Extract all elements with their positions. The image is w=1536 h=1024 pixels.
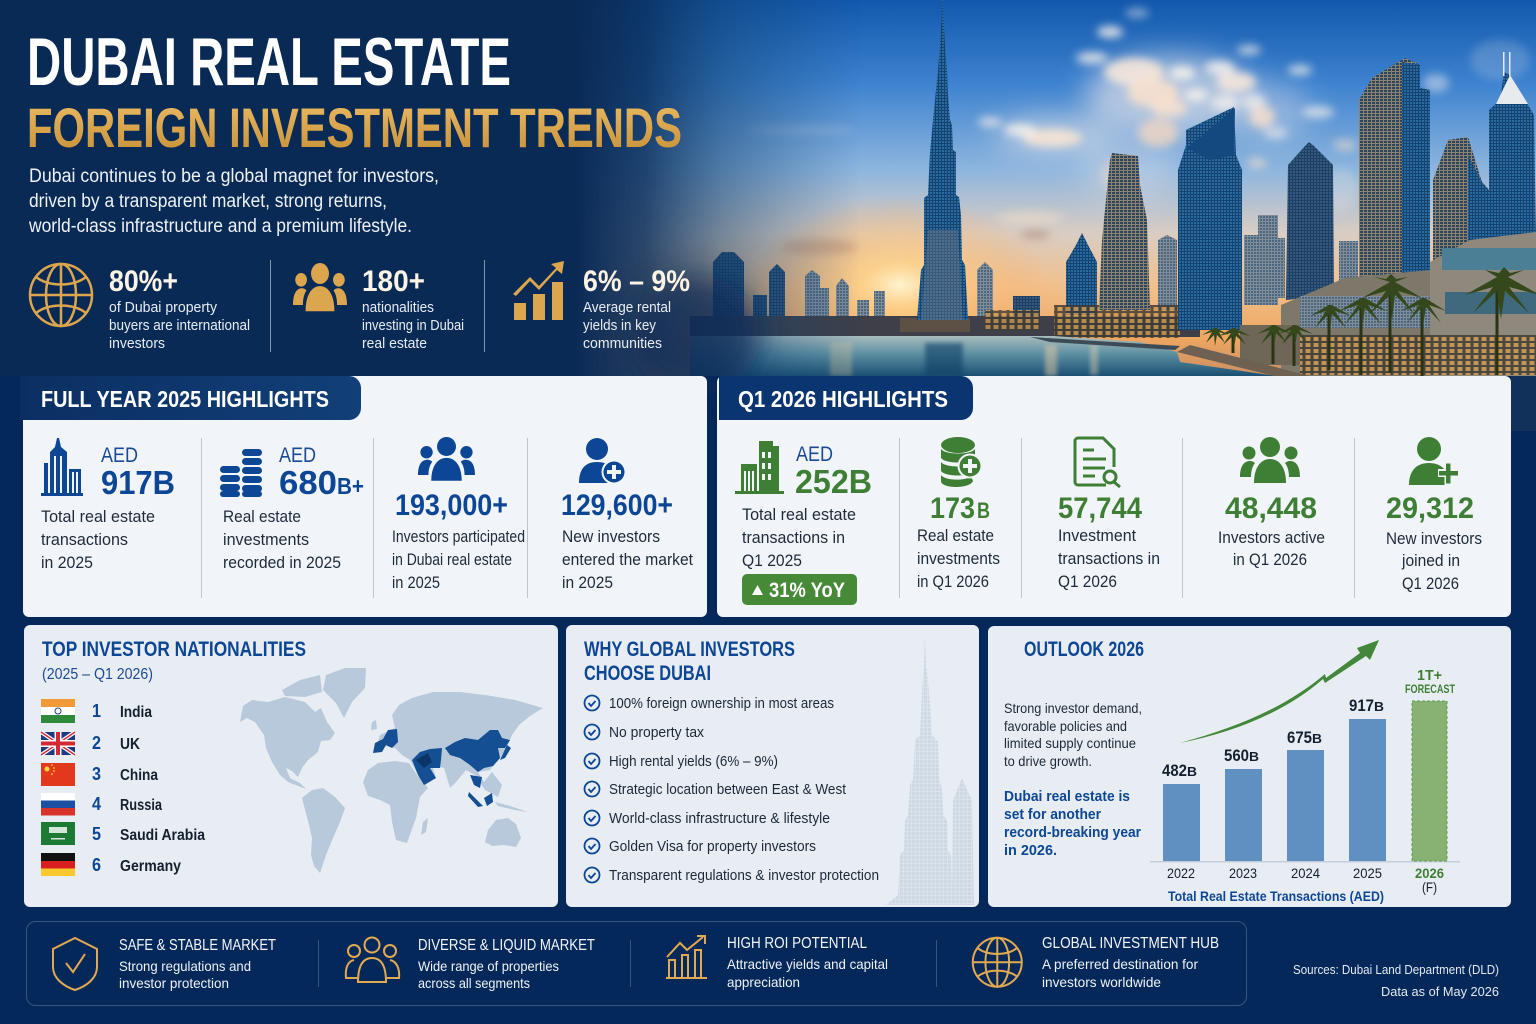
ranking: China: China	[120, 767, 158, 784]
intro text: world-class infrastructure and a premium lifestyle.	[28, 216, 412, 237]
bar chart: total real estate transactions: B	[1374, 699, 1384, 714]
panel: why global investors choose Dubai	[566, 625, 979, 907]
city base band	[690, 316, 1200, 337]
metric: 193,000+ investors: in 2025	[392, 573, 440, 592]
intro text	[28, 166, 439, 237]
ranking: Germany	[41, 853, 181, 876]
metric: AED 680B+: recorded in 2025	[223, 553, 341, 572]
bar chart: total real estate transactions: 675	[1287, 728, 1312, 747]
title: DUBAI REAL ESTATE	[27, 24, 511, 100]
ranking: Saudi Arabia: 5	[92, 824, 101, 844]
ranking: Russia	[41, 793, 162, 816]
outlook description: limited supply continue	[1004, 735, 1136, 751]
metric: AED 680B+: AED	[279, 444, 316, 467]
heading tab: FULL YEAR 2025 HIGHLIGHTS	[41, 386, 329, 412]
benefit: global investment hub: A preferred destination for	[1042, 956, 1198, 972]
arrow: growth trend	[1180, 640, 1379, 743]
panel: outlook 2026: OUTLOOK 2026	[1024, 638, 1144, 661]
ranking: China	[41, 763, 158, 786]
benefit: global investment hub: GLOBAL INVESTMENT HUB	[1042, 935, 1219, 952]
metric: 193,000+ investors	[392, 437, 525, 592]
ranking: India	[41, 699, 152, 723]
icon: gold people	[293, 263, 347, 311]
stat: 180+ nationalities: nationalities	[362, 299, 434, 316]
metric: 48,448: Investors active	[1218, 528, 1325, 547]
promenade	[1177, 345, 1310, 376]
heading tab	[20, 376, 361, 420]
ranking: India: India	[120, 704, 152, 721]
benefit: global investment hub: investors worldwide	[1042, 974, 1161, 990]
outlook description: to drive growth.	[1004, 753, 1092, 769]
checklist: Golden Visa for property investors	[609, 838, 816, 855]
bar chart: total real estate transactions: FORECAST	[1405, 684, 1455, 696]
icon: gold globe	[30, 264, 92, 326]
stat: 6% to 9% yields: communities	[583, 335, 662, 352]
benefit: high ROI potential	[666, 935, 888, 990]
outlook callout: in 2026.	[1004, 842, 1057, 859]
icon: outlined bar chart	[666, 936, 707, 978]
bar chart: total real estate transactions: Total Real Estate Transactions (AED)	[1168, 888, 1384, 904]
icon: people	[418, 437, 475, 481]
benefit: safe and stable market: SAFE & STABLE MARKET	[119, 937, 276, 954]
icon: globe	[973, 938, 1022, 987]
stat: 180+ nationalities: 180+	[362, 265, 425, 298]
metric: 173B	[917, 437, 1000, 591]
bar chart: total real estate transactions: 2023	[1229, 865, 1257, 881]
outlook callout: record-breaking year	[1004, 824, 1141, 841]
metric: AED 252B: transactions in	[742, 528, 845, 547]
icon: database with plus	[941, 437, 982, 487]
metric: 173B: in Q1 2026	[917, 572, 989, 591]
outlook description: Strong investor demand,	[1004, 700, 1142, 716]
benefit: diverse and liquid market: Wide range of properties	[418, 958, 559, 974]
metric: AED 252B: AED	[796, 443, 833, 466]
outlook callout	[1004, 788, 1141, 859]
benefit: high ROI potential: appreciation	[727, 974, 800, 990]
bar chart: total real estate transactions: 2025	[1353, 865, 1382, 881]
panel: outlook 2026	[988, 626, 1511, 907]
metric: 57,744: Investment	[1058, 526, 1136, 545]
stat: 180+ nationalities: real estate	[362, 335, 427, 352]
bar chart: total real estate transactions: B	[1187, 764, 1197, 779]
metric: AED 252B: Total real estate	[742, 505, 856, 524]
illustration: ghosted Burj Khalifa	[886, 636, 974, 905]
checklist: High rental yields (6% – 9%)	[609, 753, 778, 770]
intro text: driven by a transparent market, strong returns,	[29, 191, 387, 212]
sources note: Data as of May 2026	[1381, 984, 1499, 999]
title	[27, 24, 682, 159]
metric: 173B: B	[977, 498, 990, 523]
metric: 193,000+ investors: 193,000+	[395, 489, 508, 522]
metric: 129,600+ new investors: in 2025	[562, 573, 613, 592]
metric: 173B: Real estate	[917, 526, 994, 545]
badge: 31% YoY	[742, 574, 857, 605]
panel: bottom benefits strip	[26, 922, 1246, 1006]
bar chart: total real estate transactions: 917	[1349, 696, 1374, 715]
metric: AED 917B: in 2025	[41, 553, 93, 572]
ranking: UK	[41, 732, 140, 755]
checklist: 100% foreign ownership in most areas	[609, 695, 834, 712]
bar chart: total real estate transactions: (F)	[1422, 879, 1437, 895]
checklist: Strategic location between East & West	[609, 781, 847, 798]
icon: outlined people	[346, 938, 399, 982]
metric: 193,000+ investors: in Dubai real estate	[392, 550, 512, 569]
panel: top investor nationalities	[24, 625, 558, 907]
podium buildings	[1430, 232, 1536, 376]
bar chart: total real estate transactions: 560	[1224, 746, 1249, 765]
icon: green buildings	[735, 441, 784, 494]
metric: 29,312: 29,312	[1386, 492, 1474, 525]
benefit: safe and stable market	[53, 937, 276, 991]
benefit: safe and stable market: investor protection	[119, 975, 229, 991]
ranking: Russia: 4	[92, 794, 101, 814]
checklist: Transparent regulations & investor protection	[609, 867, 879, 884]
far skyline	[713, 215, 1358, 326]
metric: AED 917B: Total real estate	[41, 507, 155, 526]
outlook callout: Dubai real estate is	[1004, 788, 1130, 805]
icon: user with plus	[579, 438, 626, 484]
ranking: UK: 2	[92, 733, 101, 753]
heading tab	[719, 376, 973, 420]
metric: 29,312: Q1 2026	[1402, 574, 1459, 593]
stat: 180+ nationalities	[293, 263, 464, 352]
ranking: Germany: 6	[92, 855, 101, 875]
panel: top investor nationalities: (2025 – Q1 2026)	[42, 666, 153, 683]
panel: top investor nationalities: TOP INVESTOR NATIONALITIES	[42, 638, 306, 661]
panel: why global investors choose Dubai: CHOOSE DUBAI	[584, 662, 711, 685]
metric: AED 917B	[41, 438, 175, 572]
ranking: Germany: Germany	[120, 858, 181, 875]
stat: 80%+ international buyers: of Dubai property	[109, 299, 217, 316]
navy gradient over photo	[0, 0, 1536, 376]
metric: 129,600+ new investors	[561, 438, 693, 592]
stat: 6% to 9% yields: 6% – 9%	[583, 265, 690, 298]
metric: 48,448	[1218, 437, 1325, 569]
stat: 6% to 9% yields: Average rental	[583, 299, 671, 316]
benefit: safe and stable market: Strong regulations and	[119, 958, 251, 974]
bar chart: total real estate transactions: 1T+	[1417, 667, 1442, 684]
checklist	[584, 695, 879, 884]
metric: AED 680B+: 680	[279, 464, 337, 501]
stat: 6% to 9% yields	[513, 261, 690, 352]
intro text: Dubai continues to be a global magnet for investors,	[29, 166, 439, 187]
palm trees	[1233, 280, 1497, 376]
metric: 129,600+ new investors: entered the market	[562, 550, 693, 569]
metric: AED 680B+	[220, 444, 364, 572]
stat: 80%+ international buyers: 80%+	[109, 265, 178, 298]
ranking: UK: UK	[120, 736, 140, 753]
world map	[240, 668, 543, 873]
icon: people	[1240, 437, 1300, 483]
ranking: Saudi Arabia	[41, 822, 205, 845]
bar chart: total real estate transactions: B	[1312, 731, 1322, 746]
metric: AED 252B: 252B	[795, 463, 872, 500]
bar chart: total real estate transactions: 2024	[1291, 865, 1320, 881]
sources note	[1293, 962, 1499, 999]
metric: AED 680B+: Real estate	[223, 507, 301, 526]
badge: 31% YoY: 31% YoY	[769, 579, 845, 602]
outlook description: favorable policies and	[1004, 718, 1127, 734]
stat: 80%+ international buyers: buyers are international	[109, 317, 250, 334]
icon: document with magnifier	[1075, 438, 1120, 487]
panel: why global investors choose Dubai: WHY GLOBAL INVESTORS	[584, 638, 795, 661]
metric: AED 917B: 917B	[101, 464, 175, 501]
icon: tower building	[41, 438, 83, 496]
metric: 129,600+ new investors: 129,600+	[561, 489, 673, 522]
metric: 129,600+ new investors: New investors	[562, 527, 660, 546]
panel: full year 2025 highlights	[20, 376, 707, 617]
stat: 180+ nationalities: investing in Dubai	[362, 317, 464, 334]
metric: 57,744: transactions in	[1058, 549, 1160, 568]
stat: 80%+ international buyers	[30, 264, 250, 352]
panel: Q1 2026 highlights	[717, 376, 1511, 617]
icon: user with plus	[1409, 437, 1459, 485]
bar chart: total real estate transactions	[1150, 667, 1460, 904]
title: FOREIGN INVESTMENT TRENDS	[27, 96, 682, 159]
water	[690, 336, 1276, 376]
metric: AED 917B: transactions	[41, 530, 128, 549]
sources note: Sources: Dubai Land Department (DLD)	[1293, 962, 1499, 977]
icon: shield	[53, 938, 97, 990]
stat: 6% to 9% yields: yields in key	[583, 317, 656, 334]
metric: 29,312: New investors	[1386, 529, 1482, 548]
metric: AED 680B+: B+	[337, 473, 364, 499]
benefit: high ROI potential: Attractive yields and capital	[727, 956, 888, 972]
benefit: diverse and liquid market: DIVERSE & LIQUID MARKET	[418, 937, 595, 954]
benefit: global investment hub	[973, 935, 1219, 990]
ranking: China: 3	[92, 764, 101, 784]
metric: AED 252B	[735, 441, 872, 605]
mid-right towers	[1099, 153, 1150, 310]
benefit: high ROI potential: HIGH ROI POTENTIAL	[727, 935, 867, 952]
benefit: diverse and liquid market: across all segments	[418, 975, 530, 991]
outlook callout: set for another	[1004, 806, 1101, 823]
ranking: India: 1	[92, 701, 101, 721]
metric: 57,744: Q1 2026	[1058, 572, 1117, 591]
hero photo: Dubai skyline at sunset	[0, 0, 1536, 431]
checklist: No property tax	[609, 724, 704, 741]
Burj Khalifa	[917, 0, 968, 320]
bar chart: total real estate transactions: B	[1249, 749, 1259, 764]
icon: coin stacks	[220, 449, 262, 497]
metric: 29,312: joined in	[1401, 551, 1460, 570]
metric: 57,744	[1058, 438, 1160, 591]
metric: 173B: 173	[930, 492, 975, 525]
stat: 80%+ international buyers: investors	[109, 335, 165, 352]
bar chart: total real estate transactions: 2026	[1415, 865, 1444, 881]
checklist: World-class infrastructure & lifestyle	[609, 810, 830, 827]
metric: AED 917B: AED	[101, 444, 138, 467]
metric: 29,312	[1386, 437, 1482, 593]
heading tab: Q1 2026 HIGHLIGHTS	[738, 386, 948, 412]
ranking: Russia: Russia	[120, 797, 162, 814]
icon: gold growth chart	[513, 261, 564, 320]
metric: AED 252B: Q1 2025	[742, 551, 802, 570]
metric: 57,744: 57,744	[1058, 492, 1142, 525]
metric: AED 680B+: investments	[223, 530, 309, 549]
ranking: Saudi Arabia: Saudi Arabia	[120, 827, 205, 844]
bar chart: total real estate transactions: 482	[1162, 761, 1187, 780]
metric: 193,000+ investors: Investors participated	[392, 527, 525, 546]
bar chart: total real estate transactions: 2022	[1167, 865, 1195, 881]
metric: 48,448: 48,448	[1225, 492, 1317, 525]
metric: 48,448: in Q1 2026	[1233, 550, 1307, 569]
outlook description	[1004, 700, 1142, 769]
metric: 173B: investments	[917, 549, 1000, 568]
benefit: diverse and liquid market	[346, 937, 595, 991]
